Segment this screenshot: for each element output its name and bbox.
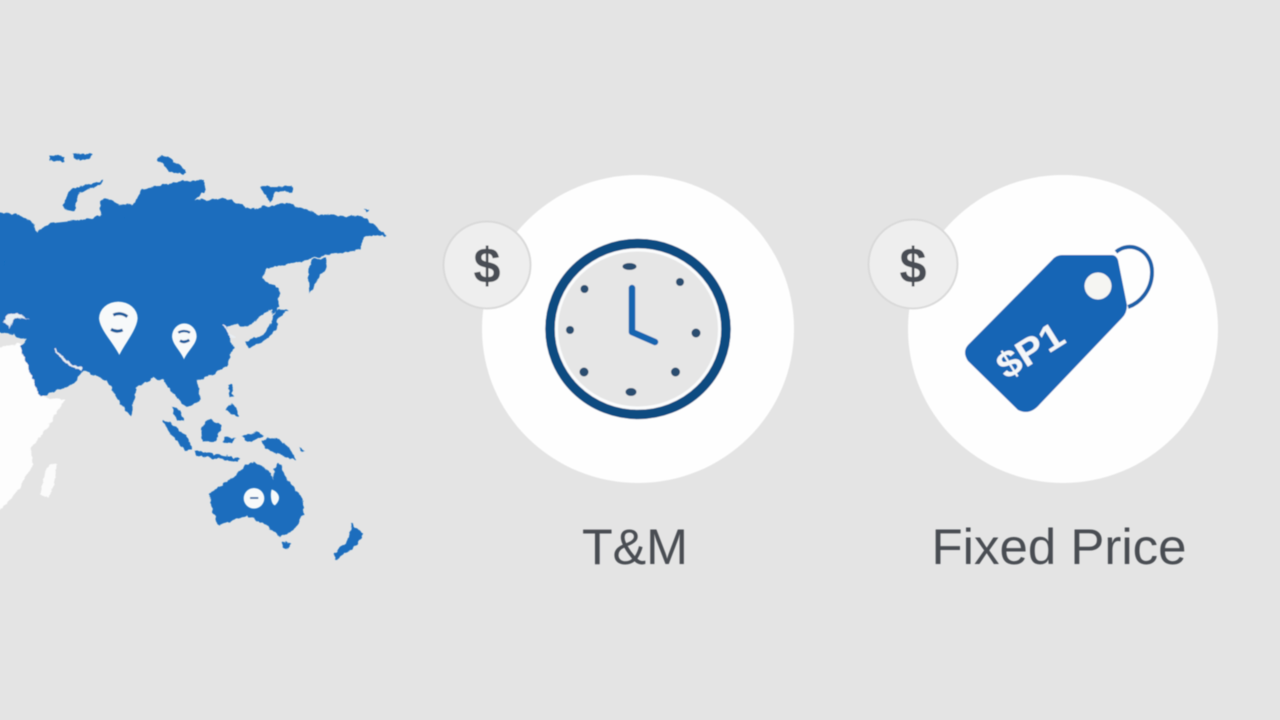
map location pins bbox=[99, 302, 279, 509]
clock ticks bbox=[566, 263, 700, 396]
dollar badge bbox=[868, 220, 958, 308]
caspian sea outline bbox=[4, 313, 28, 328]
map landmasses bbox=[0, 153, 387, 559]
northern islands bbox=[0, 153, 369, 268]
dollar badge: $ bbox=[900, 238, 927, 294]
dollar badge bbox=[444, 222, 530, 308]
label: Fixed Price bbox=[932, 519, 1186, 575]
panel: T&M bbox=[444, 175, 794, 575]
tag price text: $P1 bbox=[989, 314, 1072, 387]
location pin: large bbox=[99, 302, 138, 355]
white bay and korea edge bbox=[224, 325, 235, 338]
panel: Fixed Price bbox=[868, 175, 1218, 575]
small white island bbox=[40, 463, 57, 497]
Southeast Asian islands bbox=[163, 385, 305, 462]
gulf outline bbox=[55, 348, 82, 369]
white circle bbox=[482, 175, 794, 483]
dollar badge: $ bbox=[474, 238, 501, 294]
location pin: Australia bbox=[244, 488, 279, 509]
icon: price tag bbox=[965, 247, 1152, 412]
icon: clock bbox=[550, 244, 726, 414]
label: T&M bbox=[582, 519, 688, 575]
Eurasia landmass bbox=[0, 180, 387, 416]
white landmass at left bbox=[0, 343, 65, 530]
location pin: small bbox=[172, 323, 197, 359]
world map: Asia and Oceania bbox=[0, 153, 387, 559]
Sakhalin and coast bbox=[272, 287, 279, 315]
white circle bbox=[908, 175, 1218, 483]
tag hole bbox=[1084, 272, 1112, 300]
Tasmania bbox=[282, 542, 292, 549]
Japan bbox=[245, 310, 288, 348]
Kamchatka bbox=[308, 258, 327, 293]
Australia bbox=[209, 462, 304, 537]
New Zealand bbox=[333, 523, 363, 559]
clock hands bbox=[632, 288, 655, 342]
